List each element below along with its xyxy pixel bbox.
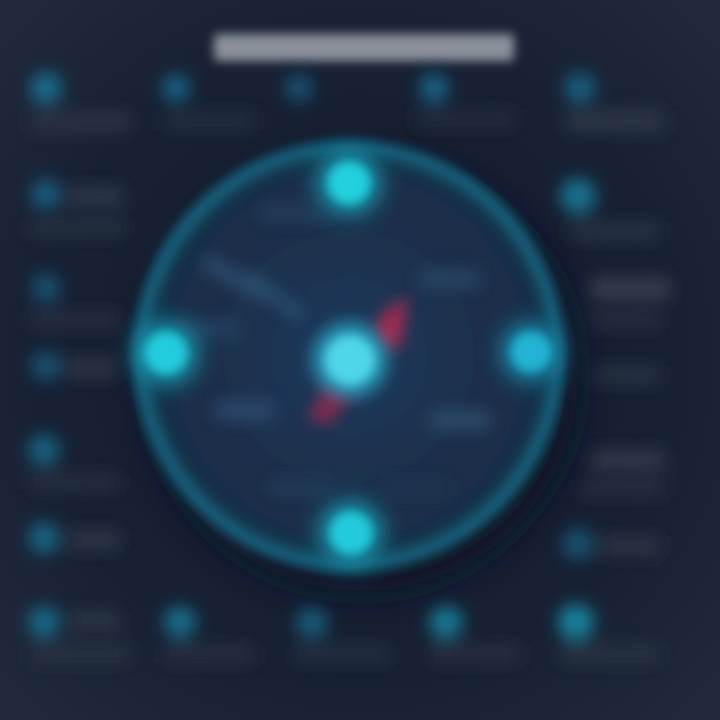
top row of list items	[30, 72, 665, 132]
dial face	[144, 151, 554, 561]
dial shadow	[146, 159, 578, 591]
title bar	[214, 34, 514, 61]
right node	[501, 322, 561, 382]
dial ring	[141, 148, 557, 564]
inner texture	[180, 205, 490, 496]
bottom node	[319, 501, 383, 565]
right column of list items	[560, 178, 670, 560]
left node	[134, 321, 198, 385]
circular dial	[134, 148, 561, 565]
left column of list items	[28, 179, 125, 554]
top node	[317, 151, 381, 215]
center hub	[312, 322, 388, 398]
red needle	[308, 296, 408, 424]
bottom row of list items	[28, 604, 660, 663]
